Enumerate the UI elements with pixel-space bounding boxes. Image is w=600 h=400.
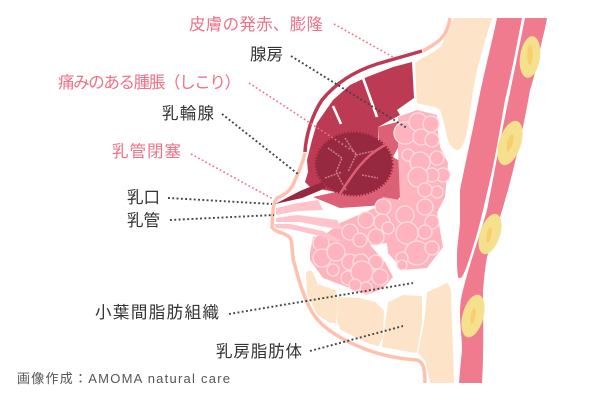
upper fat tissue xyxy=(415,18,492,150)
skin outline xyxy=(272,18,450,383)
chest muscle with ribs xyxy=(457,18,547,383)
label: blocked milk duct: 乳管閉塞 xyxy=(112,142,181,161)
image credit: 画像作成：AMOMA natural care xyxy=(17,371,230,386)
upper lobules xyxy=(394,113,450,198)
middle lobules xyxy=(342,199,439,270)
duct 2 xyxy=(276,215,343,230)
label: mammary lobe: 腺房 xyxy=(250,45,283,64)
white septa xyxy=(333,78,377,124)
mammary gland red xyxy=(305,62,414,195)
rib 2 xyxy=(492,118,528,168)
leader lines xyxy=(168,24,413,351)
rib 4 xyxy=(457,292,489,340)
mammary lobules xyxy=(310,110,450,295)
rib 1 xyxy=(517,35,543,79)
fat lobe 4 xyxy=(419,284,453,382)
label: breast fat: 乳房脂肪体 xyxy=(216,342,302,361)
label: nipple opening: 乳口 xyxy=(127,188,160,207)
lower lobules xyxy=(313,235,388,294)
label: painful swelling: 痛みのある腫脹（しこり） xyxy=(58,73,241,92)
label: areolar gland: 乳輪腺 xyxy=(162,104,214,123)
rib 3 xyxy=(474,211,506,257)
milk ducts xyxy=(274,200,343,243)
muscle right band xyxy=(459,18,547,383)
lower fat tissue xyxy=(307,272,453,382)
medium pink lobes xyxy=(313,122,412,208)
label: skin redness and swelling: 皮膚の発赤、膨隆 xyxy=(189,15,323,34)
fat lobe 2 xyxy=(338,298,383,345)
fat lobe 3 xyxy=(383,296,421,352)
duct 1 xyxy=(276,200,323,215)
breast skin redness xyxy=(305,51,422,152)
lump (shikori) xyxy=(316,133,392,197)
label: milk duct: 乳管 xyxy=(127,211,160,230)
blocked duct xyxy=(275,182,326,204)
lobule backing xyxy=(310,110,448,295)
duct 3 xyxy=(274,224,340,243)
muscle left band xyxy=(457,18,522,278)
fat lobe 1 xyxy=(307,272,337,322)
label: interlobular adipose tissue: 小葉間脂肪組織 xyxy=(95,303,219,322)
